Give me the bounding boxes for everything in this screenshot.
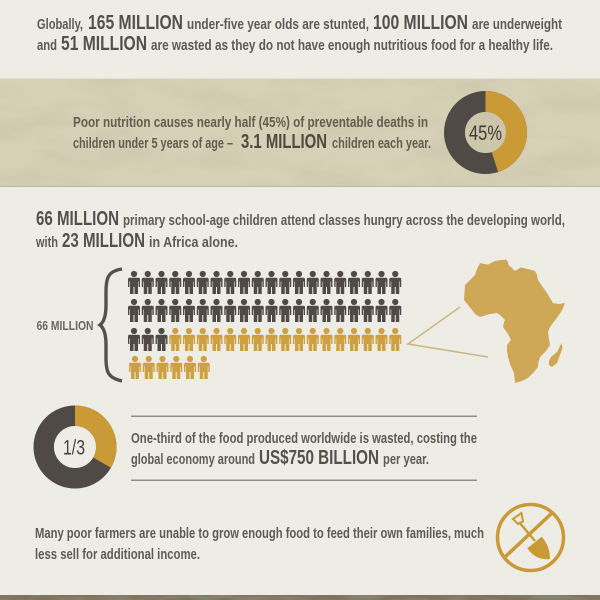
text block: preventable deaths [73, 115, 431, 153]
text block: global stunting statistics: 51 MILLION [61, 33, 147, 55]
text block: poor farmers [35, 526, 484, 563]
text block: poor farmers: Many poor farmers are unable to grow enough food to feed their own families, much [35, 526, 484, 542]
text block: hungry school children: 23 MILLION [62, 230, 145, 252]
text block: global stunting statistics: and [37, 38, 57, 54]
text block: hungry school children: with [35, 235, 58, 251]
icon: map of Africa [464, 260, 565, 383]
chart: 45% donut [454, 102, 516, 164]
text block: food waste with rules: global economy around [131, 452, 255, 468]
label: 66 million: 66 MILLION [36, 318, 94, 333]
text block: food waste with rules: per year. [383, 452, 429, 468]
text block: food waste with rules: One-third of the food produced worldwide is wasted, costing the [131, 431, 477, 447]
text block: global stunting statistics: 165 MILLION [88, 12, 183, 34]
text block: hungry school children [35, 208, 565, 252]
panel: bottom texture strip [0, 595, 600, 600]
icon: callout lines to Africa [408, 307, 488, 357]
text block: hungry school children: 66 MILLION [36, 208, 119, 230]
text block: preventable deaths: Poor nutrition causes nearly half (45%) of preventable deaths in [73, 115, 428, 131]
text block: global stunting statistics: are underweight [472, 17, 562, 33]
chart: 45% donut: 45% [469, 122, 502, 145]
text block: preventable deaths: 3.1 MILLION [241, 131, 327, 153]
text block: global stunting statistics: Globally, [37, 17, 83, 33]
panel: poor nutrition band [0, 78, 600, 187]
text block: global stunting statistics: 100 MILLION [373, 12, 468, 34]
text block: poor farmers: less sell for additional income. [35, 547, 200, 563]
text block: hungry school children: in Africa alone. [149, 235, 238, 251]
chart: one-third donut [44, 416, 106, 478]
icon: curly brace [100, 269, 122, 381]
text block: preventable deaths: children under 5 years of age – [73, 136, 233, 152]
icon: no shovel [498, 504, 564, 570]
chart: pictogram of children [128, 271, 401, 379]
text block: global stunting statistics: under-five year olds are stunted, [187, 17, 369, 33]
text block: food waste with rules: US$750 BILLION [259, 447, 379, 469]
text block: global stunting statistics [37, 12, 562, 55]
text block: preventable deaths: children each year. [332, 136, 431, 152]
text block: food waste with rules [131, 416, 477, 481]
chart: one-third donut: 1/3 [63, 436, 85, 460]
